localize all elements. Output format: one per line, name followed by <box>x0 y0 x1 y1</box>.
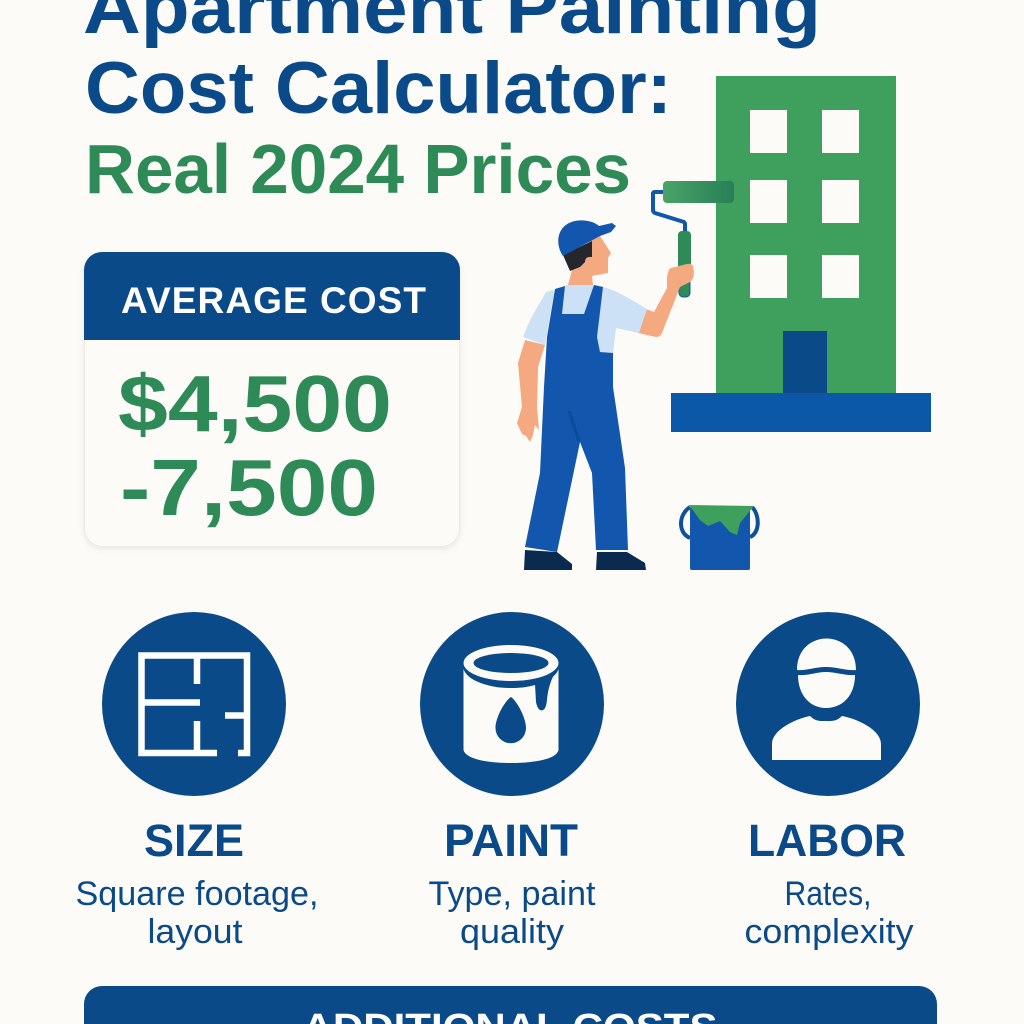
factor: size <box>76 612 318 951</box>
illustration: painter with roller <box>517 181 734 570</box>
label: LABOR <box>748 815 906 866</box>
illustration: green apartment building <box>671 76 931 432</box>
description: Rates, <box>784 875 872 913</box>
price range: -7,500 <box>120 443 378 532</box>
skin: arms, neck and face <box>517 236 694 442</box>
label: SIZE <box>144 815 244 866</box>
description <box>76 875 318 951</box>
title: Cost Calculator: <box>85 48 672 129</box>
title <box>83 0 821 208</box>
boots <box>524 550 572 570</box>
icon: floor plan <box>102 612 286 796</box>
panel: average cost <box>84 252 460 546</box>
factor: paint <box>420 612 604 951</box>
factor: labor <box>736 612 920 951</box>
panel heading: average cost: AVERAGE COST <box>121 280 426 321</box>
price range: $4,500 <box>118 359 392 448</box>
description: layout <box>148 913 243 951</box>
shirt <box>523 285 647 353</box>
icon: paint bucket <box>681 505 758 570</box>
description: complexity <box>744 913 914 951</box>
title: Real 2024 Prices <box>85 130 631 208</box>
description <box>744 875 914 951</box>
price range <box>118 359 392 532</box>
description: quality <box>460 913 564 951</box>
description: Type, paint <box>428 875 596 913</box>
description: Square footage, <box>76 875 318 913</box>
description <box>428 875 596 951</box>
overalls <box>525 285 628 552</box>
panel: additional costs <box>84 986 937 1024</box>
icon: paint can <box>420 612 604 796</box>
hair <box>563 241 592 271</box>
icon: worker <box>736 612 920 796</box>
roller <box>653 181 734 297</box>
label: PAINT <box>444 815 578 866</box>
cap <box>558 220 616 256</box>
